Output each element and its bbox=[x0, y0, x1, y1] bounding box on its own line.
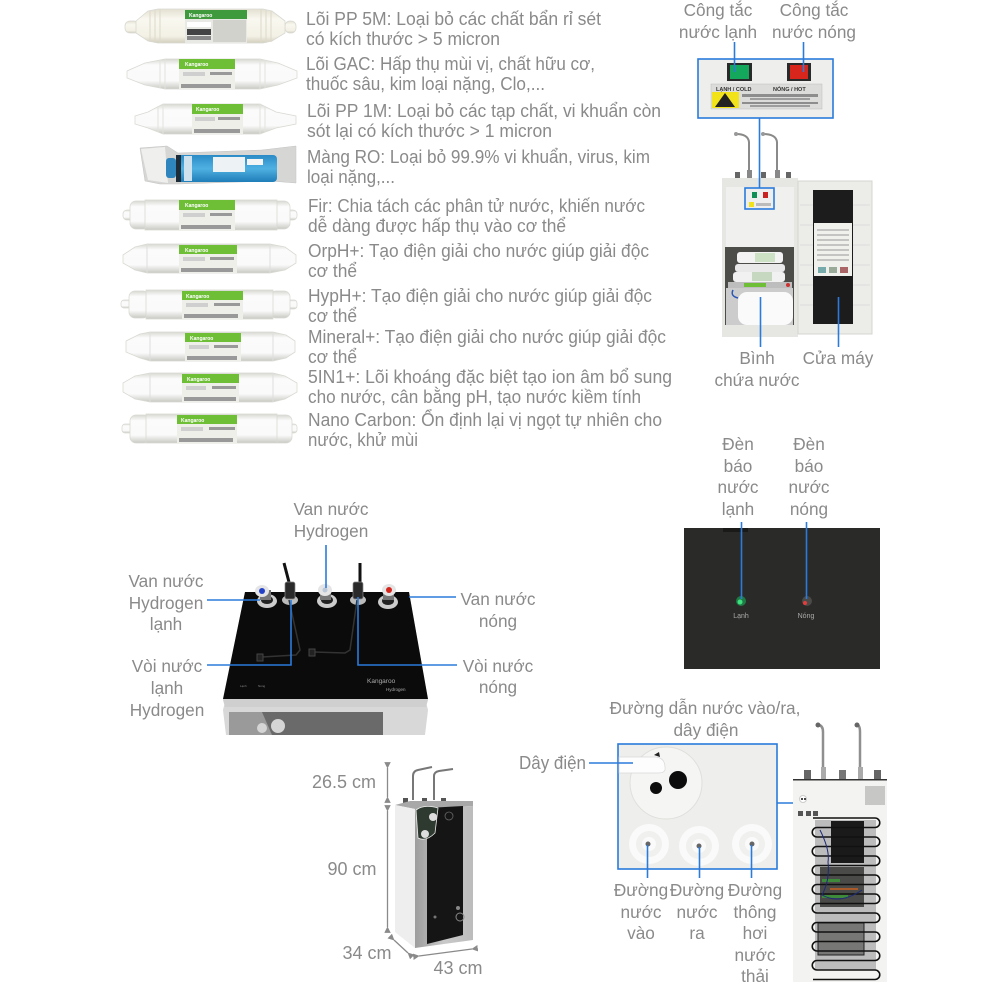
heading: nước lạnh switch: Công tắc bbox=[684, 0, 753, 20]
heading: nước lạnh switch bbox=[679, 0, 757, 42]
text: HypH+: HypH+: Tạo điện giải cho nước giúp giải độc bbox=[308, 286, 652, 306]
label: Vòi nước nóng bbox=[463, 656, 534, 697]
label: Van nước Hydrogen lạnh: lạnh bbox=[150, 614, 182, 634]
label: Van nước nóng: nóng bbox=[479, 611, 517, 631]
text: RO: Màng RO: Loại bỏ 99.9% vi khuẩn, virus, kim bbox=[307, 147, 650, 167]
label: tank: Bình bbox=[739, 348, 775, 368]
dimension: depth: 34 cm bbox=[342, 943, 392, 963]
arrow: switch zoom connector bbox=[758, 118, 760, 188]
label: Dây điện: Dây điện bbox=[519, 753, 586, 773]
label: Vòi nước lạnh Hydrogen: lạnh bbox=[151, 678, 183, 698]
callout: back ports close-up bbox=[618, 744, 777, 869]
label: Đường dẫn nước vào/ra: Đường dẫn nước vào/ra, bbox=[610, 698, 800, 718]
label: Vòi nước nóng: nóng bbox=[479, 677, 517, 697]
label: cold light: lạnh bbox=[722, 499, 754, 519]
arrow: thông hơi leader bbox=[750, 845, 752, 878]
label: Vòi nước lạnh Hydrogen: Vòi nước bbox=[132, 656, 203, 676]
panel: machine back bbox=[519, 698, 887, 986]
label: door: Cửa máy bbox=[803, 348, 874, 368]
cartridge: OrpH+ bbox=[123, 244, 296, 273]
label: cold light: nước bbox=[718, 477, 759, 497]
label: hot light: nước bbox=[789, 477, 830, 497]
text: PP 1M: sót lại có kích thước > 1 micron bbox=[307, 121, 552, 141]
text: PP 5M bbox=[306, 9, 601, 49]
machine top photo: Lạnh bbox=[240, 684, 247, 688]
text: 5IN1+: 5IN1+: Lõi khoáng đặc biệt tạo ion âm bổ sung bbox=[308, 367, 672, 387]
label: tank bbox=[715, 348, 800, 390]
label: tank: chứa nước bbox=[715, 370, 800, 390]
arrow: cold switch leader bbox=[734, 42, 736, 72]
label: Van nước Hydrogen lạnh: Hydrogen bbox=[129, 593, 203, 613]
label: cold light: Đèn bbox=[722, 434, 754, 454]
arrow: van hydrogen leader bbox=[325, 545, 327, 588]
machine front photo bbox=[395, 767, 473, 948]
label: hot light: báo bbox=[795, 456, 823, 476]
label: Van nước Hydrogen lạnh bbox=[128, 571, 204, 634]
cartridge: Mineral+ bbox=[126, 332, 295, 361]
heading: nước lạnh switch: nước lạnh bbox=[679, 22, 757, 42]
arrow: hot switch leader bbox=[802, 42, 804, 72]
text: OrpH+: cơ thể bbox=[308, 261, 357, 281]
cartridge: 5IN1+ bbox=[123, 373, 297, 402]
label: Đường dẫn nước vào/ra bbox=[610, 698, 800, 740]
arrow: close-up connector bbox=[777, 802, 803, 804]
label: Đường nước vào: Đường bbox=[614, 880, 668, 900]
label: Vòi nước lạnh Hydrogen bbox=[130, 656, 204, 720]
panel: top of machine with valves bbox=[128, 499, 536, 735]
label: Đường thông hơi nước thải bbox=[728, 880, 782, 986]
dimension: height body bbox=[327, 811, 388, 927]
label: Đường nước ra bbox=[670, 880, 724, 943]
cartridge: 5IN1+: Kangaroo bbox=[187, 377, 210, 383]
arrow: Dây điện leader bbox=[589, 762, 633, 764]
heading: nước nóng switch bbox=[772, 0, 856, 42]
label: Van nước nóng: Van nước bbox=[460, 589, 536, 609]
cartridge: PP 1M: Kangaroo bbox=[196, 107, 219, 113]
cartridge: PP 1M bbox=[135, 104, 296, 134]
RO membrane in plastic bag bbox=[140, 146, 296, 184]
label: Vòi nước lạnh Hydrogen: Hydrogen bbox=[130, 700, 204, 720]
cartridge: PP 5M bbox=[125, 9, 296, 43]
panel: machine with open door and switches bbox=[679, 0, 874, 390]
heading: nước nóng switch: nước nóng bbox=[772, 22, 856, 42]
label: Đường thông hơi nước thải: Đường bbox=[728, 880, 782, 900]
text: PP 5M: có kích thước > 5 micron bbox=[306, 29, 500, 49]
label: Van nước Hydrogen lạnh: Van nước bbox=[128, 571, 204, 591]
label: Van nước Hydrogen bbox=[293, 499, 369, 541]
label: Đường thông hơi nước thải: hơi bbox=[743, 923, 767, 943]
dimension: width bbox=[419, 949, 483, 978]
text: Mineral+ bbox=[308, 327, 666, 367]
text: Nano Carbon: Nano Carbon: Ổn định lại vị ngọt tự nhiên cho bbox=[308, 409, 662, 430]
label: Vòi nước nóng: Vòi nước bbox=[463, 656, 534, 676]
dimension: width: 43 cm bbox=[433, 958, 483, 978]
text: GAC bbox=[306, 54, 595, 94]
machine with door open bbox=[722, 132, 872, 337]
dimension: height top: 26.5 cm bbox=[312, 772, 376, 792]
text: 5IN1+: cho nước, cân bằng pH, tạo nước kiềm tính bbox=[308, 386, 641, 407]
label: Van nước nóng bbox=[460, 589, 536, 631]
cartridge: Nano Carbon: Kangaroo bbox=[181, 418, 204, 424]
cartridge: GAC bbox=[127, 59, 297, 89]
dimension: height body: 90 cm bbox=[327, 859, 377, 879]
text: Mineral+: cơ thể bbox=[308, 347, 357, 367]
arrow: vòi lạnh leader bbox=[207, 600, 291, 665]
dark light panel: Lạnh bbox=[733, 613, 749, 620]
label: Van nước Hydrogen: Van nước bbox=[293, 499, 369, 519]
label: Đường nước vào: vào bbox=[627, 923, 655, 943]
text: Mineral+: Mineral+: Tạo điện giải cho nước giúp giải độc bbox=[308, 327, 666, 347]
panel: indicator lights bbox=[684, 434, 880, 669]
text: HypH+: cơ thể bbox=[308, 306, 357, 326]
arrow: door leader bbox=[838, 297, 840, 347]
cartridge: HypH+ bbox=[121, 290, 297, 319]
arrow: cold light leader bbox=[740, 522, 742, 599]
cartridge: Nano Carbon bbox=[122, 414, 297, 443]
panel: dimensions bbox=[312, 767, 483, 978]
filter list: cartridge images and descriptions bbox=[121, 9, 672, 450]
cartridge: OrpH+: Kangaroo bbox=[185, 248, 208, 254]
text: PP 5M: Lõi PP 5M: Loại bỏ các chất bẩn rỉ sét bbox=[306, 9, 601, 29]
arrow: van lạnh leader bbox=[207, 599, 260, 601]
text: RO bbox=[307, 147, 650, 187]
cartridge: HypH+: Kangaroo bbox=[186, 294, 209, 300]
arrow: vòi nóng leader bbox=[358, 597, 457, 665]
machine top photo: Kangaroo bbox=[367, 678, 396, 685]
cartridge: GAC: Kangaroo bbox=[185, 62, 208, 68]
text: Fir: dễ dàng được hấp thụ vào cơ thể bbox=[308, 215, 566, 236]
label: hot light: Đèn bbox=[793, 434, 825, 454]
text: OrpH+: OrpH+: Tạo điện giải cho nước giúp giải độc bbox=[308, 241, 649, 261]
label: Đường nước ra: ra bbox=[689, 923, 705, 943]
label: cold light: báo bbox=[724, 456, 752, 476]
label: Đường dẫn nước vào/ra: dây điện bbox=[674, 720, 738, 740]
text: HypH+ bbox=[308, 286, 652, 326]
machine top photo: Hydrogen bbox=[386, 687, 406, 692]
label: Đường nước vào: nước bbox=[621, 902, 662, 922]
arrow: hot light leader bbox=[806, 522, 808, 599]
text: Nano Carbon: nước, khử mùi bbox=[308, 430, 418, 450]
machine back photo bbox=[793, 722, 887, 982]
label: Đường thông hơi nước thải: thông bbox=[733, 902, 777, 922]
cartridge: PP 5M: Kangaroo bbox=[189, 13, 212, 19]
label: Đường nước ra: nước bbox=[677, 902, 718, 922]
dimension: height top bbox=[312, 768, 388, 797]
label: Đường nước vào bbox=[614, 880, 668, 943]
callout: small switch marker bbox=[745, 188, 774, 209]
callout: switch close-up bbox=[698, 59, 833, 118]
cartridge: Mineral+: Kangaroo bbox=[190, 336, 213, 342]
text: GAC: Lõi GAC: Hấp thụ mùi vị, chất hữu cơ, bbox=[306, 54, 595, 74]
dimension: depth bbox=[342, 940, 408, 963]
text: Nano Carbon bbox=[308, 409, 662, 450]
arrow: tank leader bbox=[760, 297, 762, 347]
text: PP 1M bbox=[307, 101, 661, 141]
arrow: nước ra leader bbox=[698, 847, 700, 878]
callout: switch close-up: LẠNH / COLD bbox=[716, 87, 751, 93]
dark light panel bbox=[684, 528, 880, 669]
text: GAC: thuốc sâu, kim loại nặng, Clo,... bbox=[306, 74, 545, 94]
text: Fir bbox=[308, 196, 645, 236]
callout: switch close-up: NÓNG / HOT bbox=[773, 85, 806, 93]
label: Đường nước ra: Đường bbox=[670, 880, 724, 900]
arrow: nước vào leader bbox=[646, 845, 648, 878]
machine top photo: Nóng bbox=[258, 684, 266, 688]
text: PP 1M: Lõi PP 1M: Loại bỏ các tạp chất, vi khuẩn còn bbox=[307, 101, 661, 121]
label: Van nước Hydrogen: Hydrogen bbox=[294, 521, 368, 541]
dark light panel: Nóng bbox=[798, 613, 814, 620]
label: cold light bbox=[718, 434, 759, 519]
text: RO: loại nặng,... bbox=[307, 167, 395, 187]
text: OrpH+ bbox=[308, 241, 649, 281]
heading: nước nóng switch: Công tắc bbox=[780, 0, 849, 20]
arrow: van nóng leader bbox=[409, 596, 456, 598]
text: Fir: Fir: Chia tách các phân tử nước, khiến nước bbox=[308, 196, 645, 216]
label: hot light bbox=[789, 434, 830, 519]
label: Đường thông hơi nước thải: nước bbox=[735, 945, 776, 965]
text: 5IN1+ bbox=[308, 367, 672, 407]
cartridge: Fir: Kangaroo bbox=[185, 203, 208, 209]
label: Đường thông hơi nước thải: thải bbox=[741, 966, 769, 986]
label: hot light: nóng bbox=[790, 499, 828, 519]
machine top photo bbox=[223, 563, 428, 735]
cartridge: Fir bbox=[123, 200, 297, 230]
